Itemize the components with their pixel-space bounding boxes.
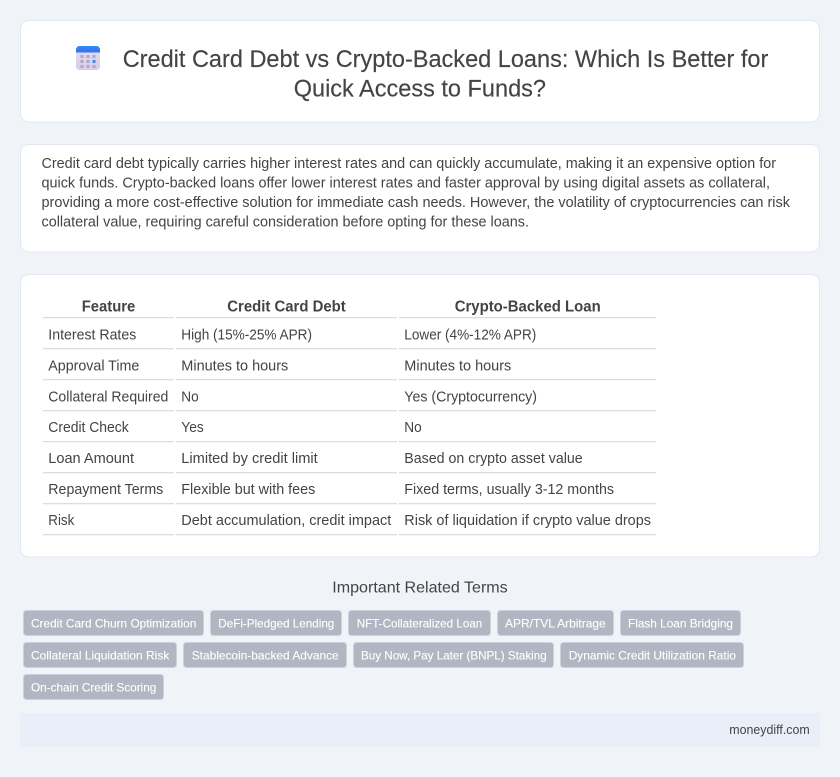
- tag: bnpl staking: [354, 642, 554, 668]
- table row: loan amount: Loan Amount: [48, 451, 134, 467]
- tag: defi-pledged lending: DeFi-Pledged Lending: [218, 616, 334, 630]
- panel: comparison table: [20, 274, 820, 557]
- tag: collateral liquidation risk: [24, 642, 176, 668]
- tag: apr/tvl arbitrage: APR/TVL Arbitrage: [505, 616, 606, 630]
- text block: summary paragraph: [42, 156, 791, 230]
- table row: interest rates: High (15%-25% APR): [181, 327, 312, 343]
- tag: bnpl staking: Buy Now, Pay Later (BNPL) Staking: [361, 648, 547, 662]
- title: [123, 46, 768, 102]
- table row: interest rates: Interest Rates: [48, 327, 136, 343]
- table row: repayment terms: [43, 482, 656, 504]
- table header row: Crypto-Backed Loan: [455, 299, 601, 316]
- table header row: Feature: [82, 299, 135, 316]
- tag: flash loan bridging: [620, 610, 740, 636]
- tag: credit card churn optimization: Credit Card Churn Optimization: [31, 616, 196, 630]
- tag: defi-pledged lending: [210, 610, 342, 636]
- table row: collateral required: Yes (Cryptocurrency): [404, 389, 537, 405]
- tag: nft-collateralized loan: NFT-Collateralized Loan: [357, 616, 482, 630]
- footer: [20, 713, 820, 747]
- table row: credit check: [43, 420, 656, 442]
- icon: calendar: [76, 46, 100, 70]
- tag: collateral liquidation risk: Collateral Liquidation Risk: [31, 648, 170, 662]
- table row: risk: Debt accumulation, credit impact: [181, 513, 391, 529]
- table header row: [43, 299, 656, 318]
- table row: loan amount: [43, 451, 656, 473]
- table row: approval time: [43, 358, 656, 380]
- table row: approval time: Approval Time: [48, 358, 139, 374]
- table row: collateral required: [43, 389, 656, 411]
- tag: stablecoin-backed advance: [184, 642, 346, 668]
- panel: introduction: [20, 144, 820, 252]
- table row: interest rates: [43, 327, 656, 349]
- text block: summary paragraph: providing a more cost-effective solution for immediate cash needs. However, the volatility of cryptocurrencies can risk: [42, 195, 791, 211]
- table row: risk: Risk of liquidation if crypto value drops: [404, 513, 651, 529]
- tag: stablecoin-backed advance: Stablecoin-backed Advance: [192, 648, 339, 662]
- panel: header: [20, 20, 820, 122]
- tag: apr/tvl arbitrage: [498, 610, 614, 636]
- title: Quick Access to Funds?: [294, 76, 546, 102]
- table row: repayment terms: Repayment Terms: [48, 482, 163, 498]
- text block: summary paragraph: Credit card debt typically carries higher interest rates and can quickly accumulate, making it an expensive option for: [42, 156, 776, 172]
- table row: credit check: No: [404, 420, 422, 436]
- tag: on-chain credit scoring: On-chain Credit Scoring: [31, 680, 156, 694]
- tag: dynamic credit utilization ratio: Dynamic Credit Utilization Ratio: [569, 648, 736, 662]
- table row: repayment terms: Flexible but with fees: [181, 482, 315, 498]
- table row: credit check: Credit Check: [48, 420, 129, 436]
- footer: moneydiff.com: [729, 723, 810, 737]
- tag: credit card churn optimization: [24, 610, 204, 636]
- tag: nft-collateralized loan: [348, 610, 490, 636]
- table row: approval time: Minutes to hours: [181, 358, 288, 374]
- table row: loan amount: Based on crypto asset value: [404, 451, 583, 467]
- table row: risk: Risk: [48, 513, 75, 529]
- panel: related term tags: [24, 610, 744, 700]
- table row: collateral required: Collateral Required: [48, 389, 168, 405]
- table header row: Credit Card Debt: [227, 299, 346, 316]
- tag: dynamic credit utilization ratio: [560, 642, 744, 668]
- table row: repayment terms: Fixed terms, usually 3-12 months: [404, 482, 614, 498]
- text block: summary paragraph: quick funds. Crypto-backed loans offer lower interest rates and faster approval by using digital assets as collateral,: [42, 176, 770, 192]
- table row: loan amount: Limited by credit limit: [181, 451, 318, 467]
- table row: interest rates: Lower (4%-12% APR): [404, 327, 536, 343]
- heading: important related terms: Important Related Terms: [332, 580, 508, 597]
- title: Credit Card Debt vs Crypto-Backed Loans: Which Is Better for: [123, 46, 768, 73]
- text block: summary paragraph: collateral value, requiring careful consideration before opting for these loans.: [42, 214, 529, 230]
- table row: risk: [43, 513, 656, 535]
- table row: approval time: Minutes to hours: [404, 358, 511, 374]
- tag: on-chain credit scoring: [24, 674, 164, 700]
- table row: collateral required: No: [181, 389, 199, 405]
- table row: credit check: Yes: [181, 420, 204, 436]
- tag: flash loan bridging: Flash Loan Bridging: [628, 616, 733, 630]
